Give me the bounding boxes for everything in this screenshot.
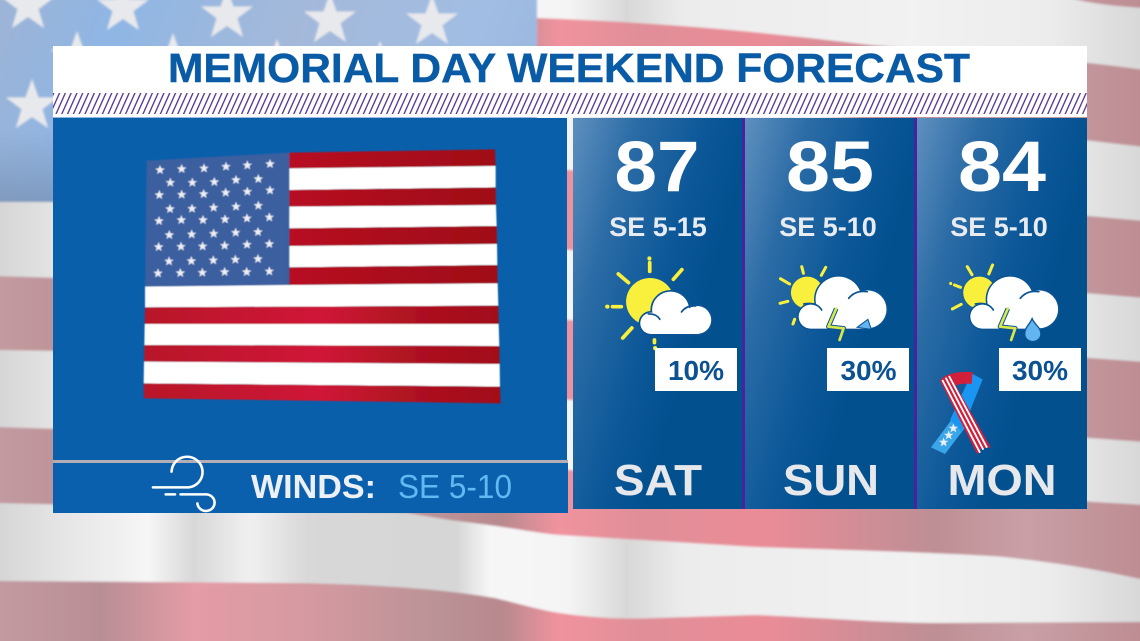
panel: flag image <box>53 118 567 460</box>
high temperature: 85 <box>786 128 874 207</box>
icon: sun, storm cloud and rain <box>951 265 1058 342</box>
precipitation chance: 30% <box>1012 355 1068 386</box>
title text: MEMORIAL DAY WEEKEND FORECAST <box>168 45 970 91</box>
panel: winds bar <box>53 457 568 513</box>
winds label: WINDS: <box>251 468 376 505</box>
divider <box>914 118 917 509</box>
wind forecast: SE 5-10 <box>950 212 1048 242</box>
precipitation chance: 10% <box>668 355 724 386</box>
day label: MON <box>948 456 1056 505</box>
wind forecast: SE 5-10 <box>779 212 877 242</box>
precipitation chance: 30% <box>840 355 897 386</box>
hatched stripe <box>53 93 1087 114</box>
american flag <box>144 149 501 403</box>
high temperature: 87 <box>614 128 700 207</box>
background stars <box>2 0 458 128</box>
background blue canton <box>0 0 537 202</box>
icon: sun and cloud <box>607 258 711 348</box>
panel: monday forecast <box>917 118 1087 509</box>
icon: sun and storm cloud <box>780 267 887 340</box>
icon: wind <box>153 457 215 511</box>
precipitation chance <box>655 348 737 391</box>
day label: SUN <box>783 456 879 505</box>
title banner <box>53 45 1087 117</box>
wind forecast: SE 5-15 <box>609 212 707 242</box>
panel: sunday forecast <box>745 118 914 509</box>
winds value: SE 5-10 <box>398 468 512 505</box>
icon: patriotic ribbon <box>931 372 991 454</box>
precipitation chance <box>827 348 909 391</box>
high temperature: 84 <box>958 128 1047 207</box>
day label: SAT <box>614 456 702 505</box>
precipitation chance <box>999 348 1081 391</box>
panel: saturday forecast <box>573 118 742 509</box>
divider <box>742 118 745 509</box>
